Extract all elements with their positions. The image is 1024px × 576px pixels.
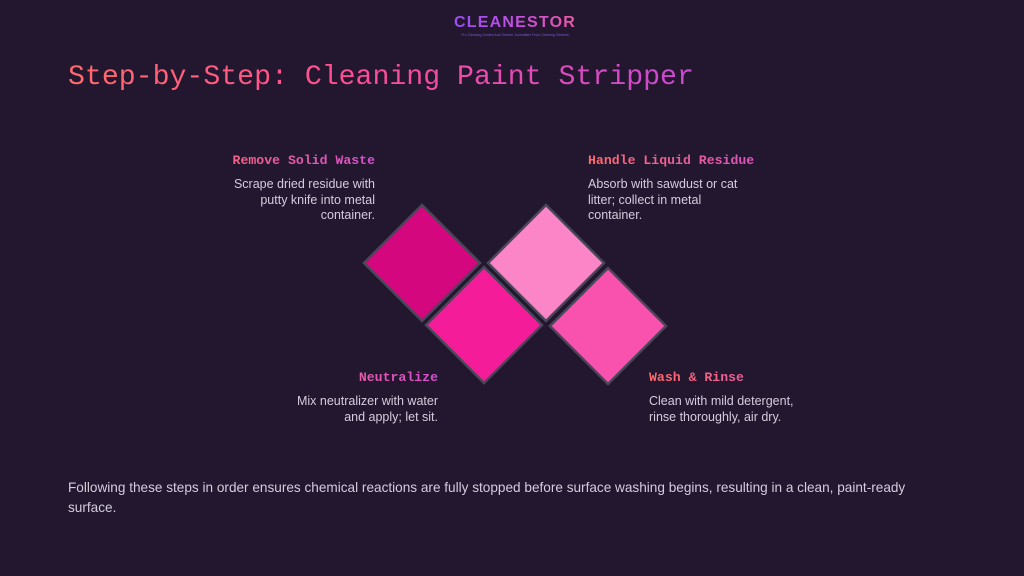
step: wash & rinse: rinse thoroughly, air dry. — [649, 410, 781, 424]
step: neutralize: Mix neutralizer with water — [297, 394, 438, 408]
step: handle liquid residue: litter; collect in metal — [588, 192, 701, 206]
step: remove solid waste: putty knife into metal — [260, 192, 375, 206]
step: remove solid waste: Remove Solid Waste — [233, 153, 375, 168]
diamond: neutralize — [426, 267, 542, 383]
logo: Pro Cleaning Guides And Service Journalism From Cleaning Seekers — [461, 33, 569, 37]
diamond: handle liquid residue — [488, 205, 604, 321]
step: wash & rinse — [649, 370, 794, 424]
step: wash & rinse: Clean with mild detergent, — [649, 394, 794, 408]
title: Step-by-Step: Cleaning Paint Stripper — [68, 62, 694, 93]
step: handle liquid residue: Absorb with sawdust or cat — [588, 177, 737, 191]
step: neutralize: Neutralize — [359, 370, 438, 385]
step: handle liquid residue — [588, 153, 754, 222]
step: remove solid waste — [233, 153, 375, 222]
diamond: wash & rinse — [550, 268, 666, 384]
step: neutralize: and apply; let sit. — [344, 410, 438, 424]
step: handle liquid residue: Handle Liquid Residue — [588, 153, 754, 168]
logo: CLEANESTOR — [454, 14, 576, 31]
step: handle liquid residue: container. — [588, 208, 642, 222]
diamond: remove solid waste — [364, 205, 480, 321]
step: remove solid waste: container. — [321, 208, 375, 222]
step: wash & rinse: Wash & Rinse — [649, 370, 744, 385]
step: neutralize — [297, 370, 438, 424]
step: remove solid waste: Scrape dried residue with — [234, 177, 375, 191]
footer text: Following these steps in order ensures chemical reactions are fully stopped before surface washing begins, resulting in a clean, paint-ready surface. — [68, 480, 905, 514]
